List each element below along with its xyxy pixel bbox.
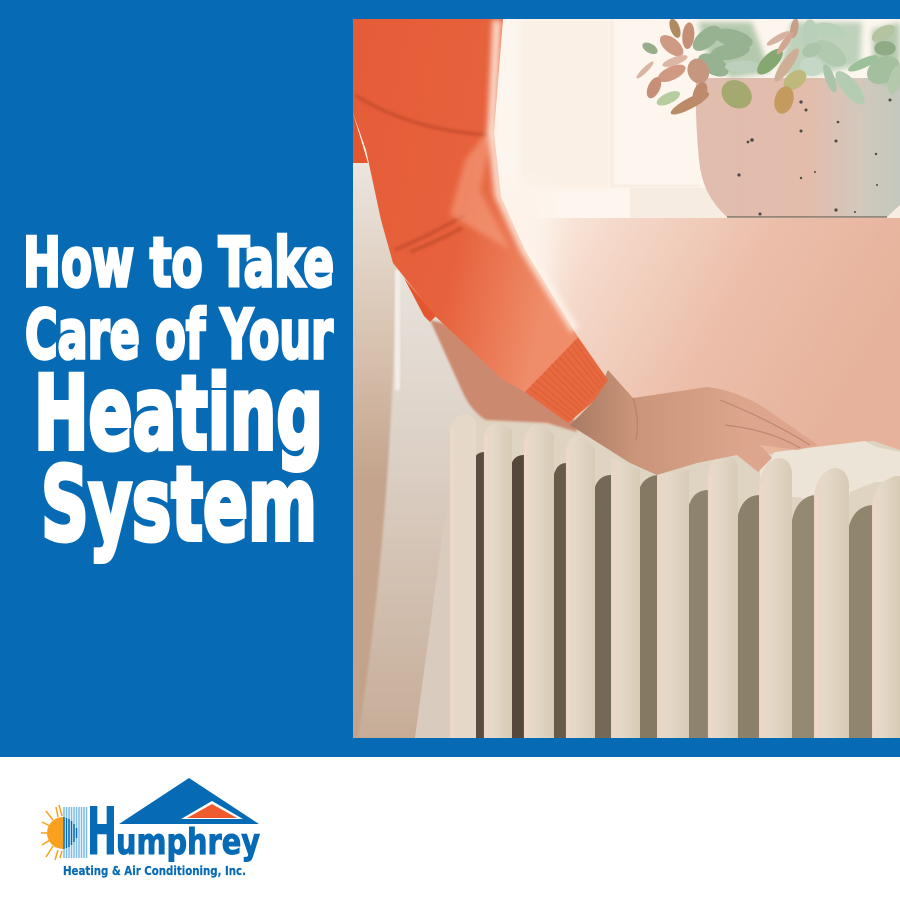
icon: sun with stripes xyxy=(41,805,86,860)
sleeve behind: far side of sweater xyxy=(353,113,436,322)
dark gaps between fins xyxy=(473,452,873,738)
plant foliage backing xyxy=(698,22,900,88)
plant leaves xyxy=(635,17,900,118)
ribbed cuff xyxy=(525,337,608,423)
left wall and curtain xyxy=(353,163,415,738)
logo tagline: Heating & Air Conditioning, Inc. xyxy=(63,864,246,878)
logo wordmark H: H xyxy=(87,795,117,870)
right hand xyxy=(570,370,818,475)
logo: Humphrey Heating & Air Conditioning xyxy=(41,778,260,878)
bright window wall xyxy=(353,19,900,219)
orange sweater sleeve xyxy=(353,19,578,392)
glow from window xyxy=(492,20,575,330)
title xyxy=(23,224,334,564)
pink wall xyxy=(510,218,900,458)
icon: roof xyxy=(119,778,259,824)
title line: Care of Your: Care of Your xyxy=(25,296,333,375)
white footer band xyxy=(0,757,900,900)
radiator xyxy=(450,414,900,738)
title line: System: System xyxy=(41,446,317,564)
logo wordmark umphrey: umphrey xyxy=(116,822,260,863)
plant pot xyxy=(696,78,900,217)
fin highlights xyxy=(484,452,708,738)
radiator body xyxy=(470,414,900,526)
sleeve folds xyxy=(355,95,488,252)
photo: hand on radiator xyxy=(353,17,900,738)
title line: How to Take: How to Take xyxy=(23,224,334,303)
left hand and arm xyxy=(430,320,577,432)
title line: Heating: Heating xyxy=(34,354,323,472)
radiator fins xyxy=(450,414,900,738)
